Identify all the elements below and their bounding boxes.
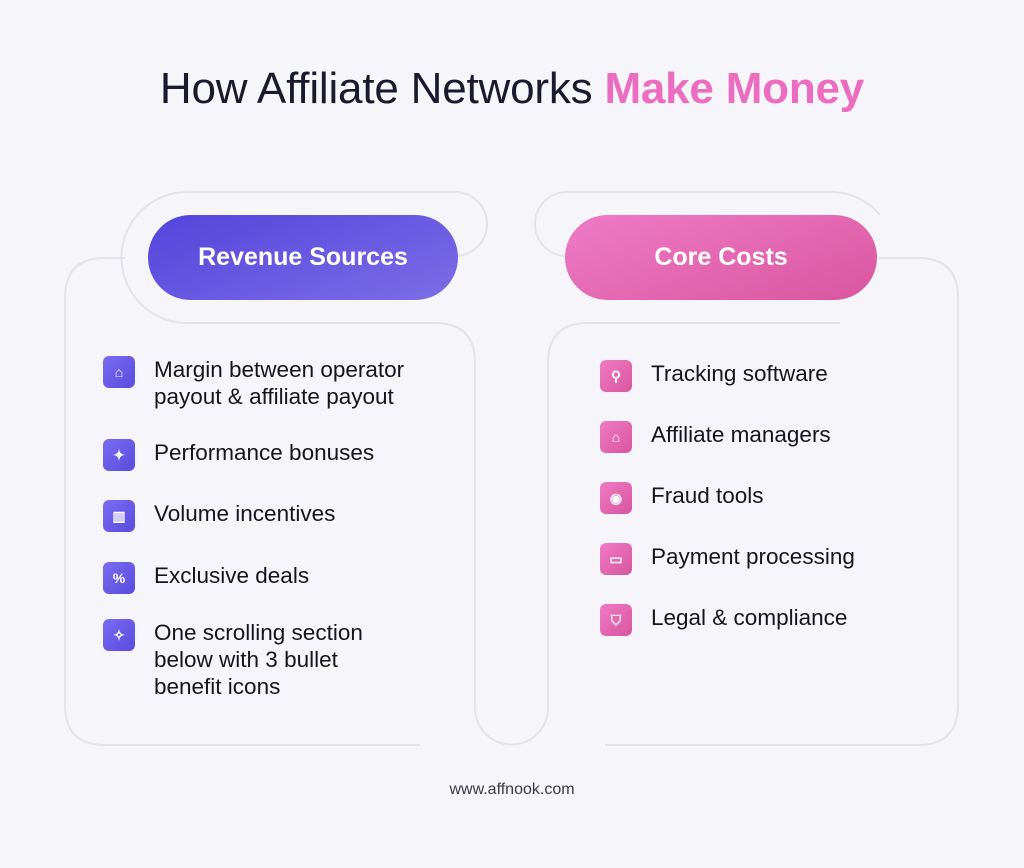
item: tracking software [600,360,828,392]
pill: Revenue Sources: Revenue Sources [198,243,408,271]
item: fraud tools: Fraud tools [651,483,764,508]
item: exclusive deals: % [113,570,125,586]
item: scrolling section: ✧ [113,626,125,642]
footer url: www.affnook.com [449,781,575,798]
item: performance bonuses: ✦ [113,446,125,462]
item: affiliate managers [600,421,831,453]
item: volume incentives: Volume incentives [154,501,335,526]
item: scrolling section: One scrolling section below with 3 bullet benefit icons [154,620,363,699]
pill: Revenue Sources [148,215,458,300]
item: volume incentives: ▥ [112,508,126,524]
list: revenue sources [103,356,404,699]
title: How Affiliate Networks Make Money [160,64,864,113]
item: legal: Legal & compliance [651,605,847,630]
pill: Core Costs [565,215,877,300]
item: legal [600,604,847,636]
item: volume incentives [103,500,335,532]
item: tracking software: Tracking software [651,361,828,386]
item: affiliate managers: Affiliate managers [651,422,831,447]
item: exclusive deals [103,562,309,594]
item: payment processing: ▭ [609,550,623,566]
item: exclusive deals: Exclusive deals [154,563,309,588]
item: payment processing: Payment processing [651,544,855,569]
item: performance bonuses: Performance bonuses [154,440,374,465]
item: legal: ⛉ [611,612,621,628]
item: tracking software: ⚲ [611,368,621,384]
item: fraud tools [600,482,764,514]
list: core costs [600,360,855,636]
pill: Core Costs: Core Costs [654,243,788,271]
item: fraud tools: ◉ [610,490,622,506]
item: performance bonuses [103,439,374,471]
item: margin: ⌂ [115,364,123,380]
item: margin: Margin between operator payout & affiliate payout [154,357,404,409]
item: affiliate managers: ⌂ [612,428,620,444]
item: payment processing [600,543,855,575]
